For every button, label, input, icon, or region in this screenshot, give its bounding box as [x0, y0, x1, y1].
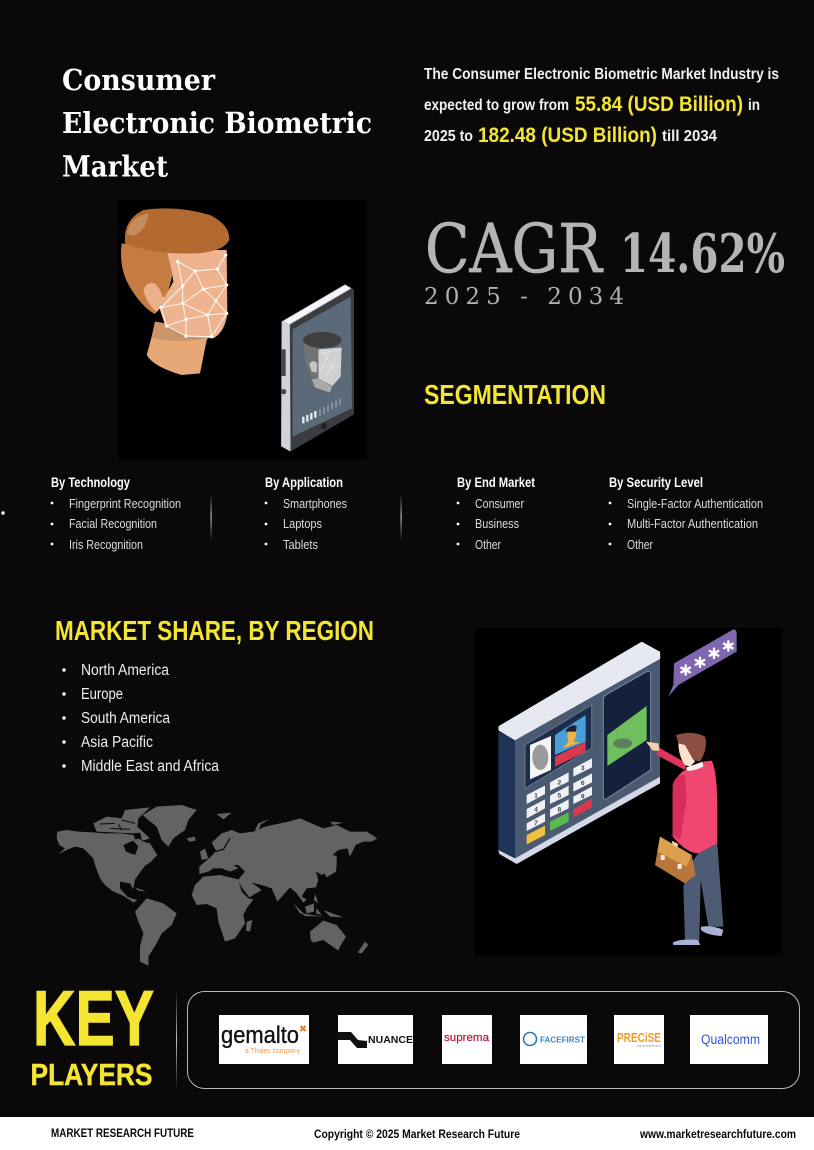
market growth summary [424, 66, 779, 147]
segment: by security level [609, 474, 763, 552]
logo: precise: biometrics [637, 1043, 661, 1048]
heading: market share by region: MARKET SHARE, BY REGION [55, 615, 374, 646]
region list: Europe [81, 686, 123, 703]
segment: by technology: Facial Recognition [69, 516, 157, 531]
region list [62, 662, 219, 775]
heading: segmentation: SEGMENTATION [424, 379, 606, 410]
title [62, 63, 372, 184]
head with face mesh [121, 208, 229, 375]
kiosk: 8 [557, 806, 561, 813]
panel: key player logos [188, 992, 800, 1088]
logo: nuance: NUANCE [368, 1034, 413, 1046]
kiosk: 2 [557, 779, 561, 786]
speech bubble [668, 629, 737, 697]
title: Market [62, 150, 169, 184]
segment: by technology: Iris Recognition [69, 537, 143, 552]
segment: by application: Laptops [283, 516, 322, 531]
footer: MARKET RESEARCH FUTURE [51, 1126, 194, 1140]
illustration: face scan and phone [118, 200, 367, 459]
market growth summary: 2025 to [424, 128, 473, 145]
kiosk: 7 [534, 820, 538, 827]
segment: by security level: By Security Level [609, 474, 703, 490]
region list: North America [81, 662, 169, 679]
CAGR figure [424, 210, 785, 310]
logo: qualcomm: Qualcomm [701, 1032, 760, 1047]
phone [281, 285, 353, 451]
market growth summary: in [748, 97, 760, 114]
segment: by security level: Single-Factor Authentication [627, 496, 763, 511]
segment: by end market: Consumer [475, 496, 525, 511]
segment: by technology: By Technology [51, 474, 130, 490]
region list: Middle East and Africa [81, 758, 219, 775]
footer: Copyright © 2025 Market Research Future [314, 1127, 520, 1141]
logo: precise [614, 1015, 664, 1064]
heading: key players [30, 974, 154, 1092]
market growth summary: 182.48 (USD Billion) [478, 124, 657, 147]
small dot [1, 511, 5, 515]
segment: by security level: Multi-Factor Authentication [627, 516, 758, 531]
logo: suprema: suprema [444, 1032, 490, 1044]
logo: facefirst [520, 1015, 587, 1064]
CAGR figure: CAGR [425, 210, 604, 288]
market growth summary: till 2034 [662, 128, 717, 145]
logo: facefirst: FACEFIRST [540, 1034, 586, 1044]
market growth summary: expected to grow from [424, 97, 569, 114]
segment: by technology [51, 474, 181, 552]
segment: by application: Smartphones [283, 496, 347, 511]
title: Electronic Biometric [62, 106, 372, 140]
map: americas and greenland [57, 805, 197, 966]
segment: by application [265, 474, 347, 552]
map: eurasia, africa and oceania [190, 809, 377, 953]
kiosk [498, 643, 660, 864]
kiosk: 1 [534, 792, 538, 799]
title: Consumer [62, 63, 216, 97]
region list: South America [81, 710, 170, 727]
logo: nuance [338, 1015, 413, 1064]
logo: gemalto: gemalto [221, 1022, 299, 1049]
segment: by application: Tablets [283, 537, 318, 552]
segment: by end market: Other [475, 537, 502, 552]
segment: by end market [457, 474, 535, 552]
heading: key players: PLAYERS [30, 1058, 152, 1092]
segment: by end market: By End Market [457, 474, 535, 490]
logo: gemalto: a Thales company [245, 1048, 300, 1055]
logo: precise: PRECiSE [617, 1030, 661, 1045]
kiosk: 5 [557, 793, 561, 800]
kiosk: 4 [534, 806, 538, 813]
illustration: biometric kiosk and man [475, 628, 782, 955]
man with briefcase [646, 733, 723, 945]
region list: Asia Pacific [81, 734, 153, 751]
logo: suprema [442, 1015, 492, 1064]
kiosk: 3 [581, 765, 585, 772]
logo: gemalto [219, 1015, 309, 1064]
segment: by application: By Application [265, 474, 343, 490]
CAGR figure: 2025 - 2034 [424, 284, 624, 310]
market growth summary: 55.84 (USD Billion) [575, 93, 743, 116]
kiosk: 6 [581, 780, 585, 787]
segment: by security level: Other [627, 537, 654, 552]
segment: by end market: Business [475, 516, 519, 531]
market growth summary: The Consumer Electronic Biometric Market Industry is [424, 66, 779, 83]
kiosk: 9 [581, 793, 585, 800]
segment: by technology: Fingerprint Recognition [69, 496, 181, 511]
logo: qualcomm [690, 1015, 768, 1064]
footer [0, 1117, 814, 1150]
heading: key players: KEY [33, 974, 154, 1062]
world map [57, 805, 377, 966]
